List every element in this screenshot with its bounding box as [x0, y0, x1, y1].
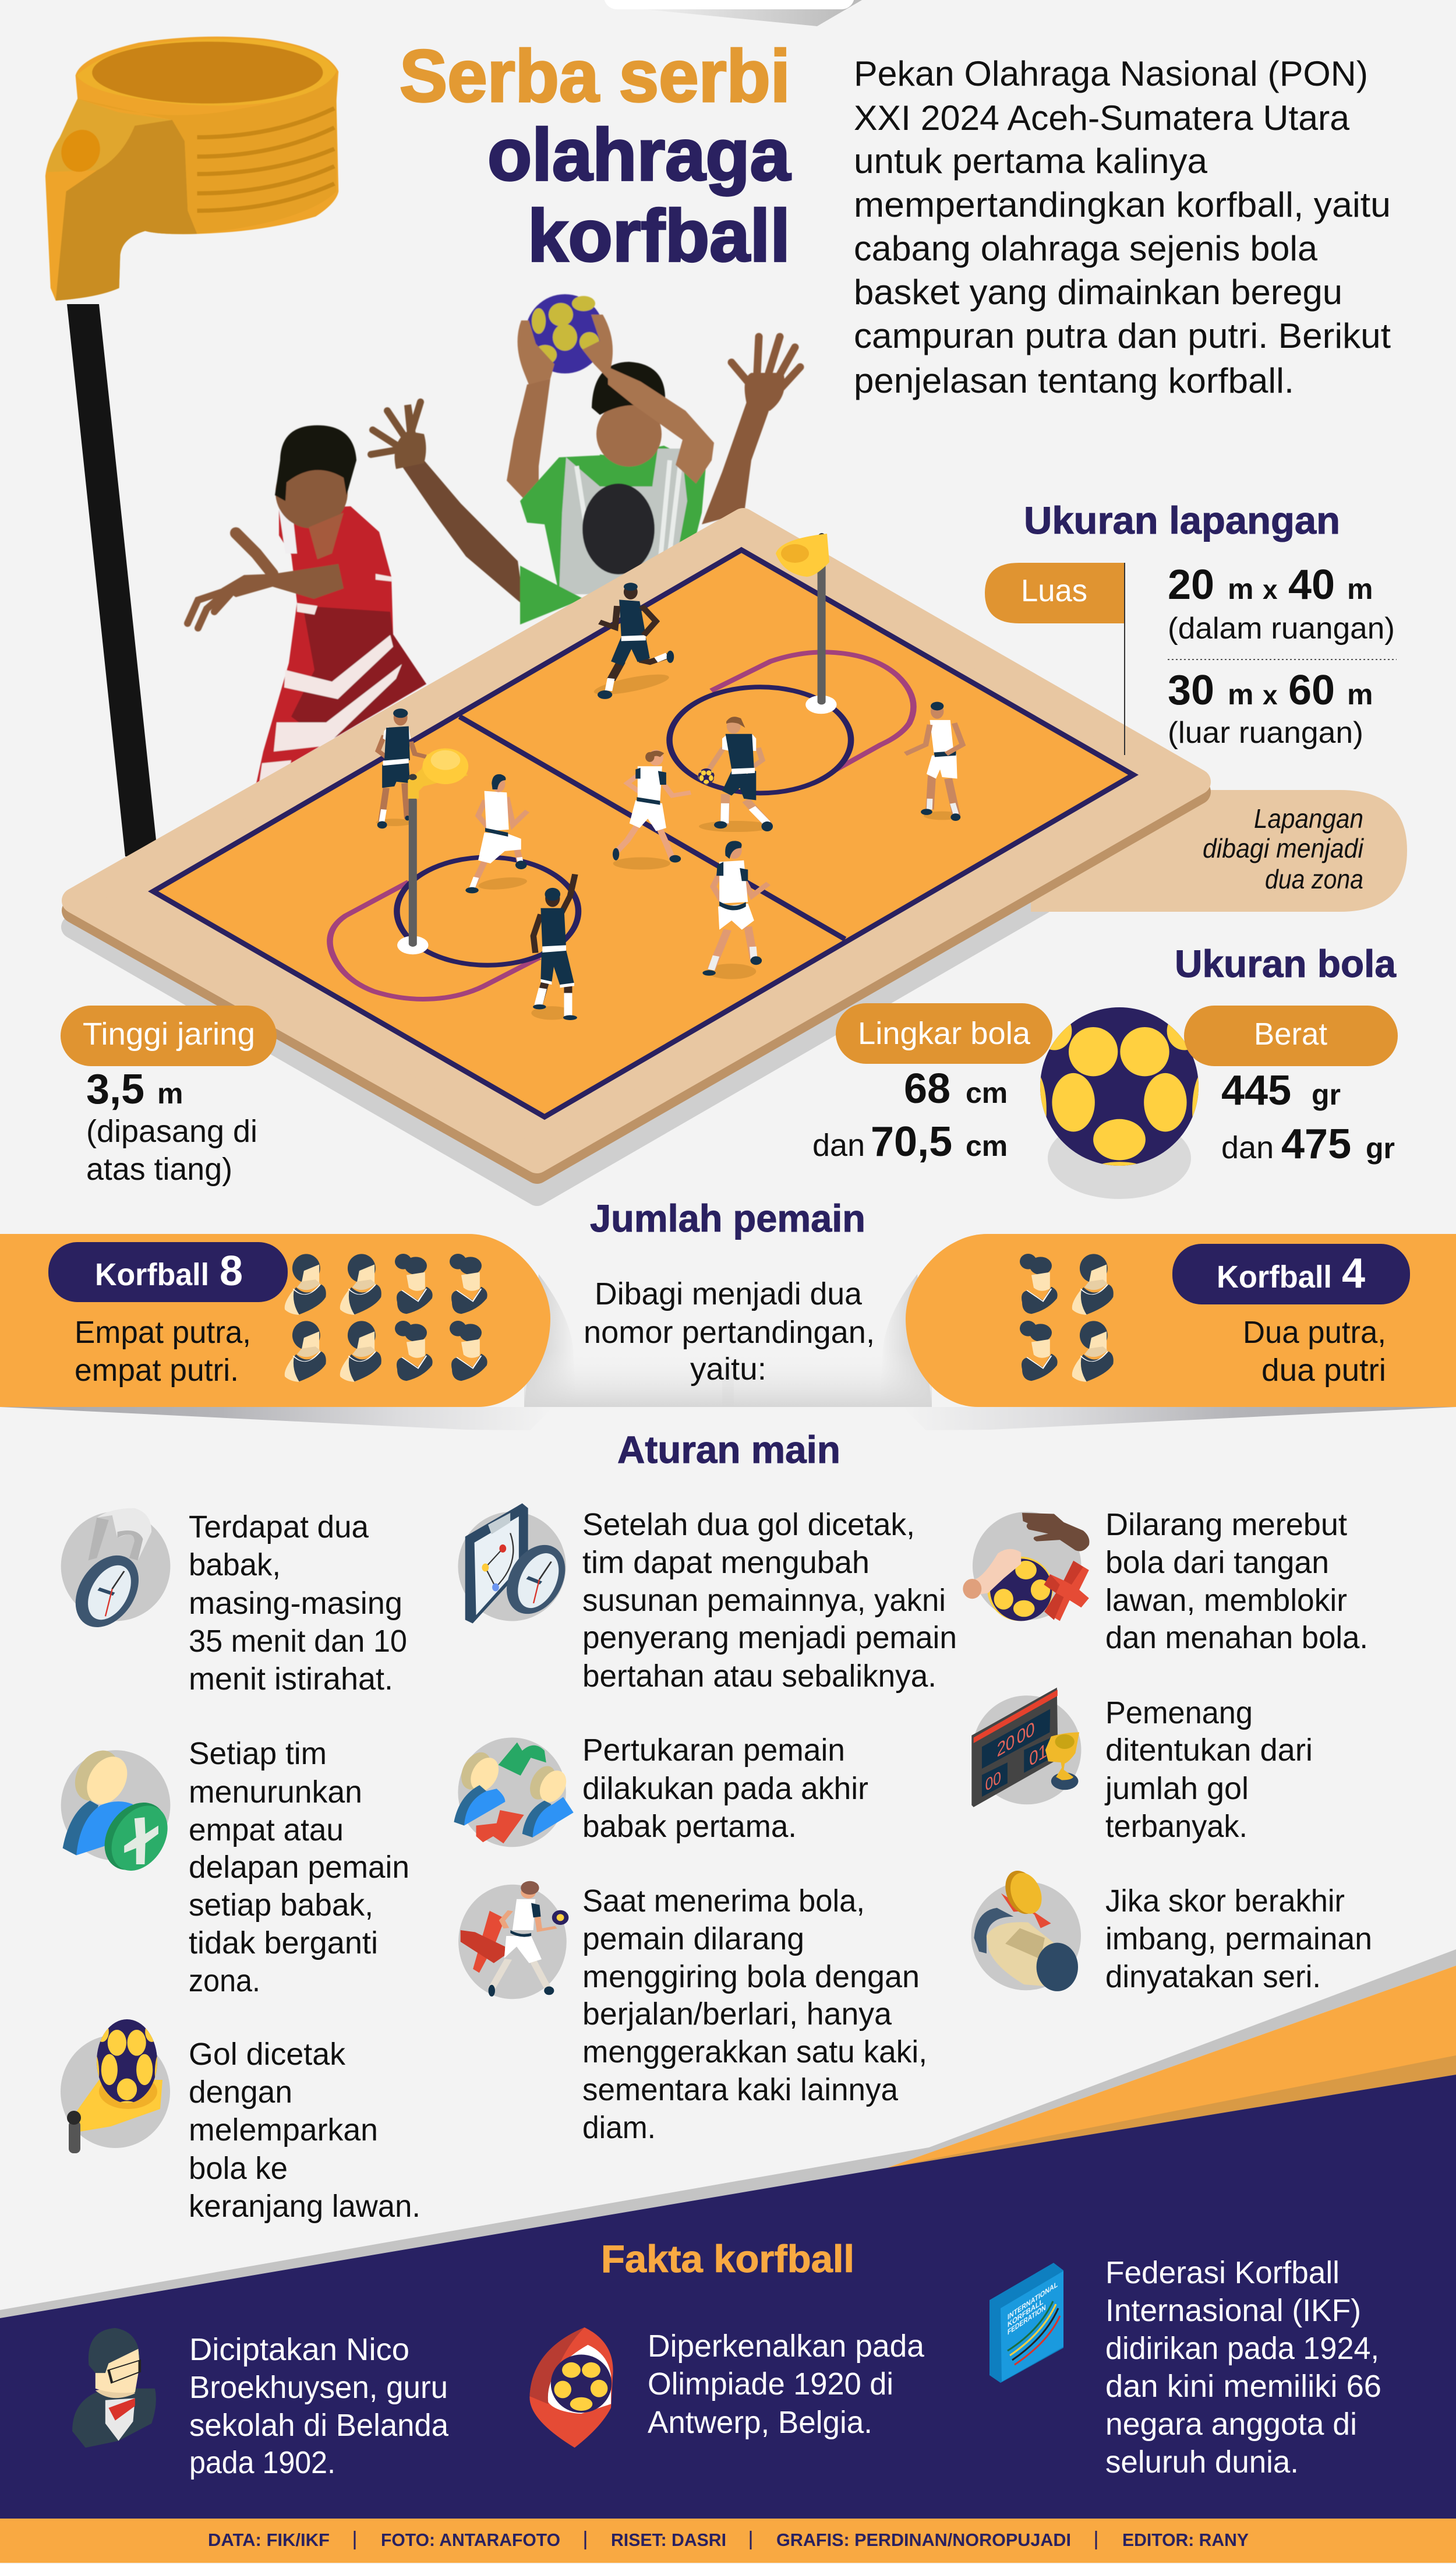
- icon: hands, ball and cross: [963, 1512, 1089, 1621]
- rule text: Pertukaran pemain: [582, 1733, 845, 1768]
- rule text: dan menahan bola.: [1105, 1620, 1368, 1655]
- circumference values: cm: [966, 1077, 1008, 1109]
- rule text: susunan pemainnya, yakni: [582, 1583, 946, 1618]
- photo: left blocking player: [371, 402, 655, 625]
- rule text: babak,: [189, 1547, 281, 1582]
- callout: two zones: dua zona: [1265, 864, 1363, 894]
- section: net height: atas tiang): [86, 1152, 232, 1187]
- rule: substitutions per half: [61, 1736, 409, 1998]
- fact text: Olimpiade 1920 di: [648, 2367, 893, 2401]
- intro text block: [854, 54, 1391, 400]
- rule text: Pemenang: [1105, 1695, 1253, 1730]
- korfball court: [75, 521, 1198, 1171]
- panel: Korfball 8: empat putri.: [75, 1353, 239, 1388]
- lower zone pill marking: [330, 882, 539, 999]
- callout: two zones: Lapangan: [1254, 803, 1363, 834]
- icon: IKF book: [989, 2263, 1063, 2383]
- footer credits bar: FOTO: ANTARAFOTO: [381, 2530, 560, 2550]
- fact text: [1105, 2255, 1381, 2480]
- outdoor size: m: [1347, 678, 1373, 711]
- court surround: [75, 521, 1198, 1161]
- pill: Lingkar bola: Lingkar bola: [858, 1016, 1031, 1051]
- rule text: pemain dilarang: [582, 1921, 804, 1956]
- rule text: babak pertama.: [582, 1809, 797, 1844]
- icon: IKF book: FEDERATION: [1008, 2302, 1046, 2337]
- icon: scoreboard and trophy: 00: [985, 1768, 1001, 1796]
- photo: right raised blocking arm: [702, 337, 800, 524]
- outdoor size: (luar ruangan): [1168, 716, 1363, 750]
- rule: no dribbling: [458, 1881, 927, 2145]
- section: net height: [61, 1006, 277, 1187]
- icon: clipboard and clock: [458, 1503, 575, 1624]
- icon: IKF book: KORFBALL: [1008, 2297, 1044, 2329]
- rule text: imbang, permainan: [1105, 1921, 1372, 1956]
- rule: winner: [971, 1688, 1313, 1844]
- rule text: [189, 2037, 420, 2224]
- rule text: keranjang lawan.: [189, 2189, 420, 2224]
- pill: Korfball 4: 4: [1342, 1250, 1365, 1297]
- rule text: [189, 1736, 409, 1998]
- panel: Korfball 4: Dua putra,: [1243, 1315, 1386, 1350]
- photo: players in action: [188, 294, 800, 787]
- indoor size: x: [1263, 574, 1278, 605]
- player: center white: [613, 750, 691, 870]
- rule text: zona.: [189, 1963, 260, 1998]
- rule: lineup change: [458, 1503, 957, 1694]
- lower post with basket: [397, 749, 468, 954]
- player icons grid: [1020, 1254, 1114, 1382]
- section: court size: [985, 499, 1397, 755]
- section: net height: m: [157, 1077, 183, 1110]
- photo: red jersey player: [188, 425, 426, 787]
- court figures and markings: [330, 547, 963, 1020]
- icon: scoreboard and trophy: [971, 1688, 1081, 1807]
- panel: Korfball 8: Empat putra,: [75, 1315, 251, 1350]
- fact text: Antwerp, Belgia.: [648, 2405, 872, 2440]
- rule text: [1105, 1507, 1368, 1655]
- court ground shadow: [73, 816, 1042, 1194]
- rule text: [189, 1510, 407, 1697]
- rule text: empat atau: [189, 1812, 344, 1847]
- intro text block: XXI 2024 Aceh-Sumatera Utara: [854, 98, 1350, 137]
- icon: person with plus: [61, 1747, 177, 1875]
- circumference values: 68: [904, 1066, 950, 1112]
- intro text block: untuk pertama kalinya: [854, 142, 1208, 181]
- rule text: diam.: [582, 2110, 656, 2145]
- rule text: Setelah dua gol dicetak,: [582, 1507, 915, 1542]
- intro text block: basket yang dimainkan beregu: [854, 273, 1342, 312]
- fact text: [648, 2329, 925, 2440]
- weight values: gr: [1312, 1078, 1341, 1111]
- ball shadow: [1048, 1117, 1191, 1199]
- indoor size: 20: [1168, 562, 1214, 608]
- outdoor size: 30: [1168, 667, 1214, 714]
- heading: Jumlah pemain: Jumlah pemain: [590, 1197, 865, 1240]
- court side thickness: [75, 531, 1198, 1171]
- rule text: menggerakkan satu kaki,: [582, 2034, 927, 2069]
- rule text: Terdapat dua: [189, 1510, 369, 1544]
- fact text: Federasi Korfball: [1105, 2255, 1340, 2290]
- intro text block: cabang olahraga sejenis bola: [854, 229, 1318, 268]
- section: ball size: [812, 942, 1398, 1199]
- rule text: delapan pemain: [189, 1850, 409, 1885]
- rule text: sementara kaki lainnya: [582, 2072, 899, 2107]
- band shadows: [0, 1274, 1456, 1430]
- callout: two zones: dibagi menjadi: [1203, 833, 1365, 863]
- fact text: didirikan pada 1924,: [1105, 2331, 1379, 2366]
- intro text block: campuran putra dan putri. Berikut: [854, 316, 1391, 355]
- icon: handshake and medal: [971, 1870, 1081, 1991]
- pill: Lingkar bola: [836, 1003, 1052, 1064]
- rule: how to score: [61, 2019, 420, 2224]
- rule text: tidak berganti: [189, 1925, 378, 1960]
- indoor size: [1168, 562, 1395, 646]
- outdoor size: m: [1228, 678, 1253, 711]
- icon: clock: [61, 1508, 170, 1632]
- rule text: lawan, memblokir: [1105, 1583, 1347, 1618]
- fact text: Diperkenalkan pada: [648, 2329, 925, 2364]
- photo: korfball pole: [67, 304, 158, 856]
- rule text: [1105, 1884, 1372, 1994]
- section: net height: (dipasang di: [86, 1114, 257, 1149]
- icon: scoreboard and trophy: 00: [1017, 1717, 1035, 1749]
- fact text: dan kini memiliki 66: [1105, 2369, 1381, 2404]
- label pill: Luas: [985, 563, 1125, 623]
- player: raised-arm bottom dark: [531, 874, 577, 1020]
- fact text: Diciptakan Nico: [189, 2332, 409, 2367]
- player icons grid: [285, 1254, 487, 1382]
- fact: federation: [989, 2255, 1381, 2480]
- section: net height: 3,5: [86, 1066, 144, 1113]
- icon: ball into basket: [61, 2019, 170, 2153]
- rule: player swap: [454, 1733, 868, 1847]
- circumference values: dan: [812, 1128, 865, 1163]
- footer credits bar: EDITOR: RANY: [1122, 2530, 1249, 2550]
- rule text: melemparkan: [189, 2112, 378, 2147]
- fact: inventor: [72, 2328, 449, 2480]
- upper basket: [776, 533, 829, 577]
- player: right white lower: [702, 841, 768, 979]
- icon: map pin with ball: [529, 2327, 613, 2447]
- rule text: dilakukan pada akhir: [582, 1771, 868, 1806]
- player: right white: [905, 702, 963, 821]
- court playing surface: [153, 550, 1133, 1117]
- rule text: [582, 1733, 868, 1844]
- rule text: [582, 1507, 957, 1694]
- rule text: jumlah gol: [1104, 1771, 1249, 1806]
- center text: two match numbers: yaitu:: [690, 1352, 766, 1387]
- circumference values: 70,5: [871, 1119, 952, 1165]
- footer credits bar: GRAFIS: PERDINAN/NOROPUJADI: [776, 2530, 1071, 2550]
- intro text block: Pekan Olahraga Nasional (PON): [854, 54, 1368, 93]
- rule text: ditentukan dari: [1105, 1733, 1313, 1768]
- ball illustration: [1021, 1007, 1218, 1175]
- rule: no stealing: [963, 1507, 1368, 1655]
- heading: Aturan main: Aturan main: [617, 1428, 840, 1471]
- top tab shadow and pill: [604, 0, 862, 26]
- fact text: sekolah di Belanda: [189, 2408, 449, 2443]
- player: left vest: [376, 708, 427, 828]
- section: net height: Tinggi jaring: [83, 1017, 255, 1052]
- fact text: seluruh dunia.: [1105, 2445, 1299, 2480]
- upper zone pill marking: [711, 652, 913, 771]
- photo: yellow korfball basket: [45, 37, 338, 301]
- circumference values: [812, 1066, 1008, 1165]
- outdoor size: x: [1263, 680, 1278, 710]
- player: center dark vest with ball: [696, 717, 773, 832]
- lower zone circle: [397, 857, 578, 965]
- rule text: Gol dicetak: [189, 2037, 346, 2072]
- panel: Korfball 8: [0, 1234, 550, 1407]
- outdoor size: 60: [1288, 667, 1335, 714]
- icon: Nico Broekhuysen: [72, 2328, 156, 2447]
- title: korfball: [528, 195, 790, 277]
- weight values: gr: [1366, 1132, 1395, 1165]
- intro text block: penjelasan tentang korfball.: [854, 361, 1294, 400]
- upper zone circle: [670, 687, 851, 793]
- rule: draw: [971, 1870, 1372, 1994]
- rule text: Jika skor berakhir: [1105, 1884, 1345, 1918]
- weight values: [1221, 1067, 1395, 1168]
- indoor size: m: [1347, 573, 1373, 605]
- rule text: bola ke: [189, 2151, 288, 2186]
- heading: Fakta korfball: Fakta korfball: [601, 2237, 854, 2280]
- weight values: 445: [1221, 1067, 1291, 1114]
- fact text: pada 1902.: [189, 2445, 335, 2480]
- pill: Korfball 8: [48, 1242, 288, 1302]
- intro text block: mempertandingkan korfball, yaitu: [854, 185, 1391, 224]
- center text: two match numbers: Dibagi menjadi dua: [595, 1276, 863, 1311]
- callout: two zones: [1031, 790, 1407, 912]
- rule text: Dilarang merebut: [1105, 1507, 1347, 1542]
- label pill: Luas: Luas: [1021, 573, 1087, 608]
- outdoor size: [1168, 667, 1373, 750]
- center text: two match numbers: nomor pertandingan,: [584, 1315, 875, 1350]
- indoor size: 40: [1288, 562, 1335, 608]
- fact text: [189, 2332, 449, 2480]
- rule text: terbanyak.: [1105, 1809, 1248, 1844]
- footer credits bar: DATA: FIK/IKF: [208, 2530, 330, 2550]
- rule text: bertahan atau sebaliknya.: [582, 1659, 936, 1694]
- rule text: berjalan/berlari, hanya: [582, 1997, 892, 2032]
- icon: scoreboard and trophy: 01: [1029, 1739, 1047, 1771]
- circumference values: cm: [966, 1130, 1008, 1162]
- rule text: dinyatakan seri.: [1105, 1959, 1321, 1994]
- weight values: dan: [1221, 1130, 1274, 1165]
- rule text: setiap babak,: [189, 1888, 373, 1923]
- indoor size: (dalam ruangan): [1168, 612, 1395, 646]
- icon: player and red cross: [458, 1881, 568, 1999]
- rule text: dengan: [189, 2075, 292, 2110]
- fact text: Internasional (IKF): [1105, 2293, 1361, 2328]
- pill: Korfball 4: Korfball: [1217, 1260, 1332, 1295]
- heading: Ukuran bola: Ukuran bola: [1175, 942, 1397, 985]
- icon: scoreboard and trophy: 20: [997, 1730, 1015, 1761]
- pill: Korfball 8: 8: [220, 1248, 243, 1295]
- rule text: menggiring bola dengan: [582, 1959, 920, 1994]
- pill: Berat: [1184, 1006, 1398, 1066]
- pill: Korfball 4: [1172, 1244, 1410, 1304]
- footer credits bar: [0, 2519, 1456, 2563]
- rule text: [1104, 1695, 1313, 1844]
- court center line: [460, 717, 845, 939]
- rule text: masing-masing: [189, 1586, 402, 1621]
- rule text: Saat menerima bola,: [582, 1884, 865, 1918]
- pill: Korfball 8: Korfball: [95, 1257, 209, 1292]
- pill: Berat: Berat: [1254, 1017, 1327, 1052]
- diagonal footer background: [0, 1949, 1456, 2519]
- center text: two match numbers: [584, 1276, 875, 1387]
- fact text: negara anggota di: [1105, 2407, 1357, 2442]
- photo: green jersey player: [507, 362, 714, 594]
- title: olahraga: [487, 114, 791, 196]
- rule text: penyerang menjadi pemain: [582, 1620, 957, 1655]
- player: left white: [465, 774, 528, 893]
- title: Serba serbi: [400, 35, 790, 117]
- indoor size: m: [1228, 573, 1253, 605]
- panel: Korfball 4: [906, 1234, 1456, 1407]
- rule text: [582, 1884, 927, 2145]
- rule: two halves: [61, 1508, 407, 1697]
- fact: Olympics: [529, 2327, 925, 2447]
- icon: IKF book: INTERNATIONAL: [1008, 2279, 1058, 2322]
- fact text: Broekhuysen, guru: [189, 2370, 448, 2405]
- rule text: Setiap tim: [189, 1736, 327, 1771]
- panel: Korfball 4: dua putri: [1261, 1353, 1386, 1388]
- rule text: menit istirahat.: [189, 1662, 393, 1697]
- weight values: 475: [1281, 1121, 1351, 1168]
- icon: two players with arrows: [454, 1737, 574, 1847]
- rule text: 35 menit dan 10: [189, 1624, 407, 1659]
- heading: Ukuran lapangan: Ukuran lapangan: [1024, 499, 1340, 542]
- photo: korfball held overhead: [518, 294, 613, 385]
- footer credits bar: RISET: DASRI: [611, 2530, 726, 2550]
- rule text: bola dari tangan: [1105, 1545, 1329, 1580]
- player: running top dark: [592, 583, 674, 699]
- title: [400, 35, 791, 277]
- rule text: menurunkan: [189, 1775, 362, 1810]
- upper post: [805, 547, 837, 714]
- rule text: tim dapat mengubah: [582, 1545, 870, 1580]
